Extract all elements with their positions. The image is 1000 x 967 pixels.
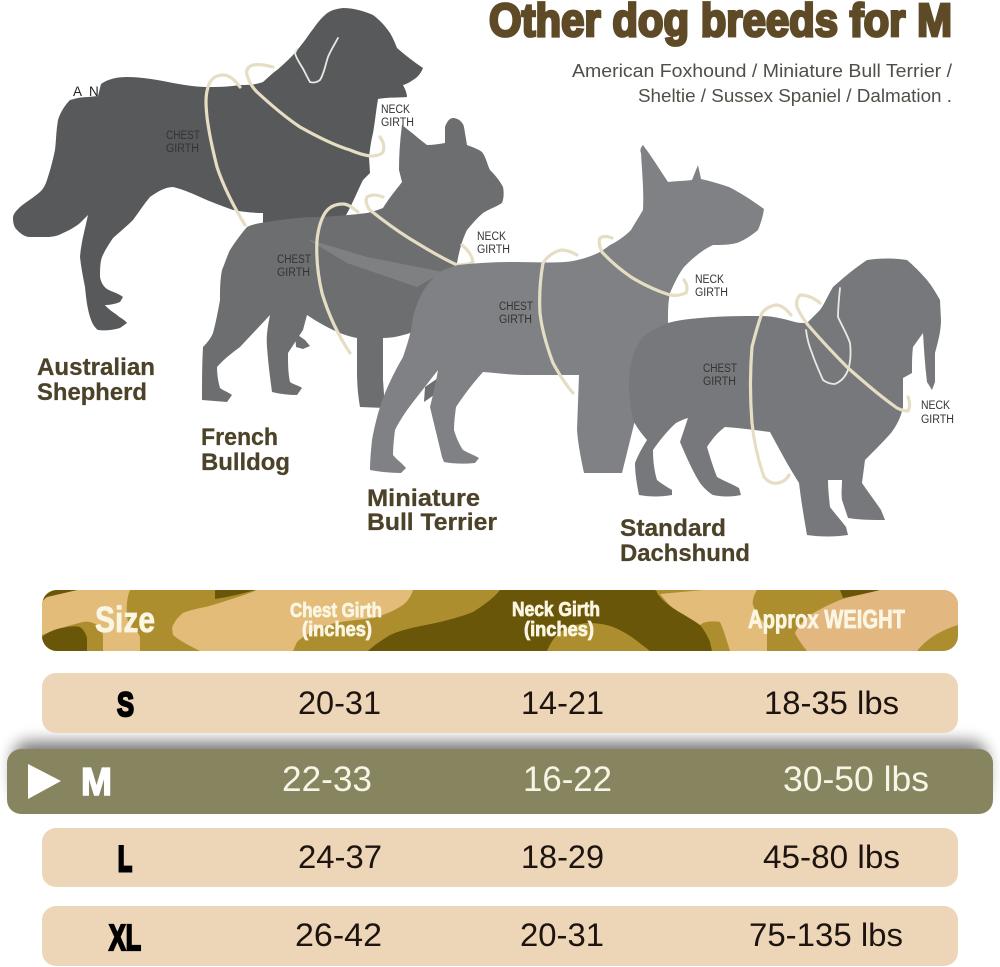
icon: arrow marker: [28, 764, 61, 799]
breed list text: [572, 60, 953, 106]
breed name: Standard Dachshund: Standard: [620, 515, 726, 542]
header: Chest Girth: (inches): [302, 619, 372, 641]
header: Neck Girth: Neck Girth: [512, 599, 600, 621]
breed name: Australian Shepherd: Shepherd: [37, 379, 147, 406]
row L: 45-80 lbs: [763, 839, 900, 875]
chest girth label: CHEST: [166, 130, 200, 142]
neck girth label: NECK: [921, 400, 950, 412]
row S: 18-35 lbs: [764, 685, 899, 721]
row M highlighted: 16-22: [523, 760, 612, 799]
row L: L: [118, 840, 132, 879]
header: Chest Girth: Chest Girth: [290, 600, 382, 622]
chest girth label: GIRTH: [703, 376, 736, 388]
row S: [42, 673, 958, 733]
neck girth label: GIRTH: [921, 414, 954, 426]
breed list text: Sheltie / Sussex Spaniel / Dalmation .: [638, 85, 952, 106]
row XL: 75-135 lbs: [749, 917, 903, 953]
row L: 18-29: [521, 839, 604, 875]
row L: [42, 828, 958, 887]
chest girth label: CHEST: [703, 363, 737, 375]
breed name: Standard Dachshund: Dachshund: [620, 540, 750, 567]
table header with camouflage: [42, 590, 958, 651]
chest girth label: GIRTH: [499, 314, 532, 326]
row XL: [42, 906, 958, 966]
row XL: XL: [109, 917, 141, 958]
breed name: French Bulldog: French: [201, 424, 278, 451]
neck girth label: GIRTH: [477, 244, 510, 256]
row S: 20-31: [298, 685, 381, 721]
row M highlighted: [7, 742, 993, 814]
breed name: French Bulldog: Bulldog: [201, 449, 290, 476]
row L: 24-37: [298, 839, 382, 875]
dog: Miniature Bull Terrier: [370, 145, 764, 473]
chest girth label: GIRTH: [277, 267, 310, 279]
chest girth label: GIRTH: [166, 143, 199, 155]
neck girth label: GIRTH: [695, 287, 728, 299]
row XL: 20-31: [520, 917, 604, 953]
row M highlighted: M: [81, 761, 112, 804]
dog: French Bulldog: [202, 118, 510, 408]
row S: S: [117, 686, 134, 724]
neck girth label: NECK: [381, 104, 410, 116]
neck girth label: GIRTH: [381, 117, 414, 129]
chest girth label: CHEST: [277, 254, 311, 266]
header: Approx WEIGHT: Approx WEIGHT: [748, 604, 905, 634]
header: Size: Size: [95, 599, 155, 640]
dog: Standard Dachshund: [629, 258, 954, 536]
neck girth label: NECK: [477, 231, 506, 243]
breed name: Australian Shepherd: Australian: [37, 354, 155, 381]
dog: Australian Shepherd: [13, 8, 423, 330]
row S: 14-21: [521, 685, 604, 721]
breed name: Miniature Bull Terrier: Bull Terrier: [367, 509, 497, 536]
row M highlighted: 22-33: [282, 760, 372, 799]
header: Neck Girth: (inches): [524, 619, 594, 641]
neck girth label: NECK: [695, 274, 724, 286]
row XL: 26-42: [295, 917, 382, 953]
text fragment on dog's back: A N: [73, 84, 101, 99]
breed name: Miniature Bull Terrier: Miniature: [367, 485, 480, 512]
chest girth label: CHEST: [499, 301, 533, 313]
breed list text: American Foxhound / Miniature Bull Terrier /: [572, 60, 953, 81]
row M highlighted: 30-50 lbs: [783, 760, 929, 799]
